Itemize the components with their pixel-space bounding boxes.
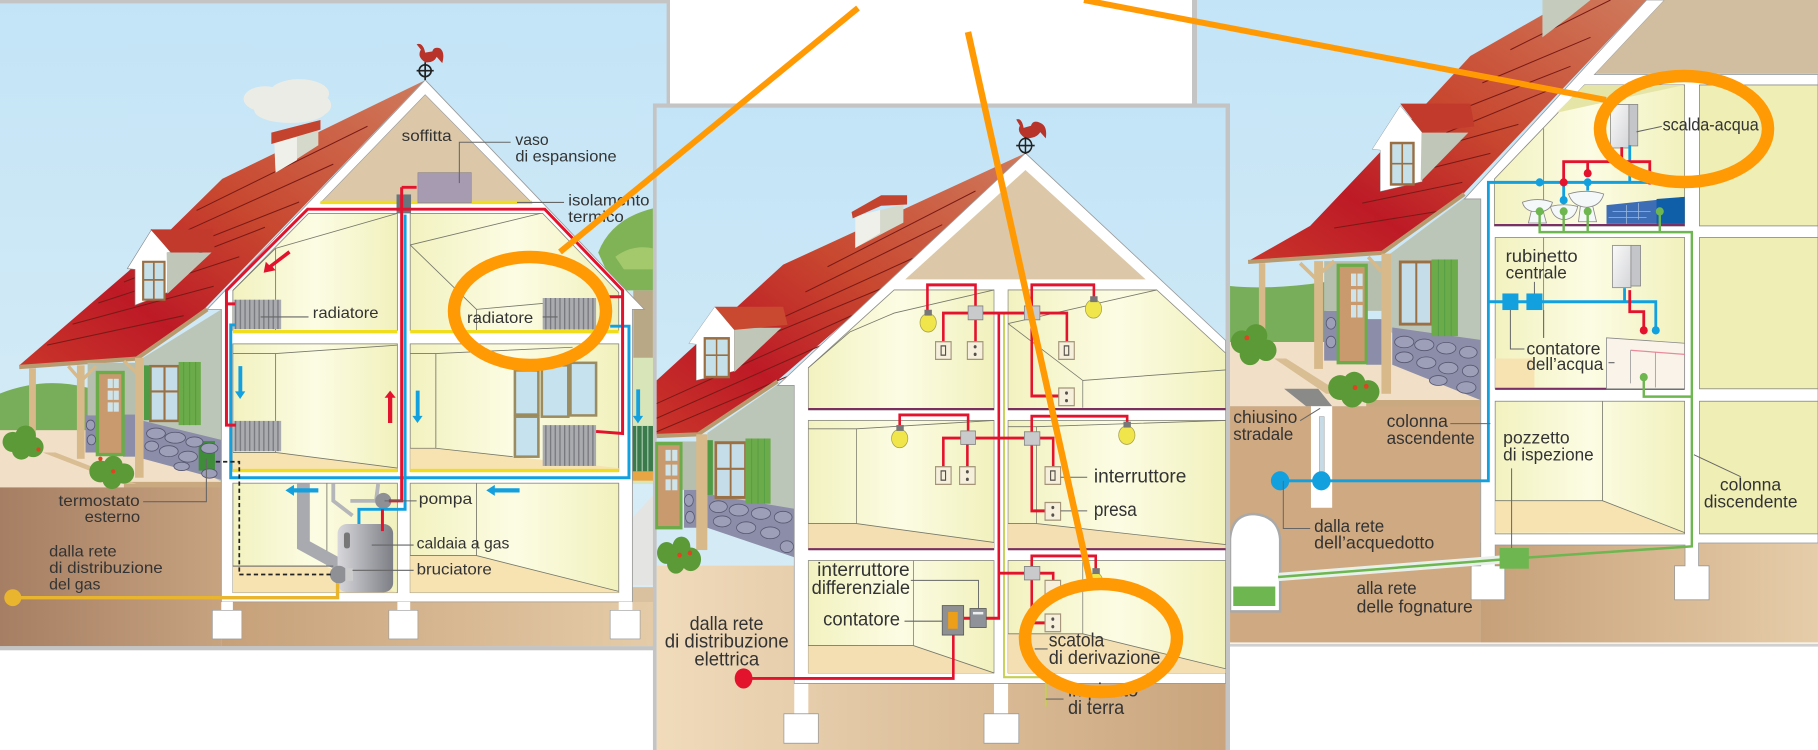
attic — [1595, 0, 1818, 74]
labels: radiatore — [467, 309, 533, 327]
house section — [1464, 0, 1818, 600]
sewer — [1230, 514, 1500, 611]
bulb sockets — [896, 296, 1131, 574]
labels: elettrica — [694, 648, 760, 670]
earth wire — [1004, 313, 1046, 707]
labels: di distribuzione — [665, 631, 789, 652]
callout: radiator ring and line — [454, 8, 858, 365]
attic — [320, 95, 532, 203]
green drain pipes — [1500, 207, 1692, 569]
side wing and porch — [29, 309, 221, 482]
panel: heating system — [0, 0, 670, 650]
labels — [49, 127, 650, 593]
labels: dell’acqua — [1526, 355, 1604, 374]
labels: discendente — [1704, 492, 1798, 511]
shrubs — [3, 426, 134, 489]
labels: contatore — [1526, 339, 1601, 358]
landscape — [1230, 282, 1480, 407]
labels: di derivazione — [1049, 647, 1160, 668]
house section — [778, 153, 1226, 683]
thermostat wire — [216, 462, 333, 575]
side wing and porch — [1259, 198, 1480, 400]
flue and boiler — [303, 483, 393, 592]
labels: radiatore — [313, 304, 379, 322]
labels: delle fognature — [1357, 597, 1473, 617]
roof — [19, 81, 424, 367]
roof — [1248, 0, 1647, 262]
labels: presa — [1094, 499, 1138, 520]
kitchen unit — [1607, 338, 1685, 389]
callout: junction box ring and line — [968, 32, 1177, 692]
red wiring — [744, 285, 1127, 678]
dormer — [689, 307, 788, 380]
blue water pipes — [1271, 145, 1660, 490]
bathroom fixtures — [1522, 191, 1685, 224]
switches and sockets — [936, 342, 1074, 632]
window — [515, 363, 596, 457]
labels: dalla rete — [49, 543, 117, 560]
shrub — [657, 537, 701, 574]
labels: di ispezione — [1503, 445, 1594, 465]
rooms — [233, 213, 619, 593]
leader lines — [904, 477, 1087, 699]
room perspective — [233, 213, 619, 593]
labels: scalda-acqua — [1663, 115, 1759, 135]
roof — [657, 153, 1025, 436]
chimney — [1542, 0, 1590, 37]
labels: alla rete — [1357, 579, 1417, 598]
labels: dell’acquedotto — [1314, 533, 1434, 552]
labels: dalla rete — [690, 613, 764, 634]
labels: del gas — [49, 575, 100, 593]
labels: chiusino — [1233, 408, 1297, 427]
leader lines — [1283, 126, 1741, 548]
leader lines — [143, 142, 564, 570]
chimney — [271, 120, 320, 173]
water heaters — [1611, 104, 1641, 288]
blue return pipes — [231, 215, 629, 524]
panel: electrical system — [653, 103, 1230, 750]
labels: scatola — [1049, 629, 1105, 651]
chimney — [852, 195, 907, 248]
blank title area — [667, 0, 1197, 104]
underground — [1230, 406, 1818, 642]
room perspective — [808, 290, 1226, 673]
stone base — [1326, 318, 1478, 393]
labels: termostato — [59, 492, 140, 510]
labels: stradale — [1233, 425, 1293, 444]
labels: vaso — [515, 131, 549, 149]
insulation floors — [233, 202, 619, 471]
red hot water pipes — [1560, 147, 1650, 335]
labels: interruttore — [817, 559, 910, 580]
room perspective — [1494, 85, 1685, 533]
meter and differential switch — [942, 606, 986, 635]
labels — [1233, 115, 1798, 617]
underground — [0, 487, 667, 646]
labels: esterno — [85, 508, 140, 526]
side wing and porch — [657, 385, 794, 557]
labels: termico — [568, 208, 624, 226]
expansion tank — [397, 173, 471, 213]
labels: colonna — [1720, 475, 1782, 494]
labels: caldaia a gas — [417, 535, 509, 552]
junction boxes — [961, 306, 1040, 580]
underground — [657, 566, 1226, 750]
labels: centrale — [1506, 263, 1567, 283]
cloud — [244, 79, 331, 123]
labels — [665, 465, 1186, 718]
labels: pozzetto — [1503, 428, 1570, 448]
labels: differenziale — [812, 577, 910, 598]
manhole and shaft — [1284, 389, 1332, 508]
labels: di terra — [1068, 697, 1125, 718]
stone base — [86, 420, 218, 478]
red flow pipes — [226, 187, 623, 531]
landscape — [0, 208, 667, 585]
shrubs — [1231, 324, 1379, 407]
rooms — [1494, 85, 1818, 534]
gas pipe — [4, 583, 338, 606]
dormer — [127, 229, 215, 305]
radiators — [234, 298, 596, 466]
labels: contatore — [823, 608, 900, 630]
light bulbs — [892, 300, 1135, 588]
weathervane — [1016, 119, 1046, 154]
labels: colonna — [1387, 412, 1448, 431]
attic — [905, 170, 1146, 279]
labels: soffitta — [402, 127, 452, 145]
supply point — [735, 668, 752, 689]
labels: impianto — [1068, 680, 1138, 701]
labels: ascendente — [1387, 429, 1475, 448]
labels: isolamento — [568, 192, 650, 209]
labels: di distribuzione — [49, 559, 163, 577]
labels: dalla rete — [1314, 517, 1384, 536]
rooms — [808, 290, 1226, 673]
labels: pompa — [419, 490, 472, 508]
labels: rubinetto — [1506, 247, 1578, 266]
foundations — [784, 683, 1019, 743]
callout: water heater ring and line — [1084, 0, 1768, 182]
switch and socket glyphs — [941, 345, 1069, 628]
labels: bruciatore — [417, 561, 492, 578]
arrows — [235, 250, 643, 496]
stone base — [684, 494, 794, 553]
panel: water system — [1190, 0, 1818, 650]
weathervane — [417, 44, 443, 80]
labels: di espansione — [515, 148, 617, 166]
dormer — [1372, 104, 1474, 191]
house section — [207, 80, 644, 639]
labels: interruttore — [1094, 465, 1186, 487]
